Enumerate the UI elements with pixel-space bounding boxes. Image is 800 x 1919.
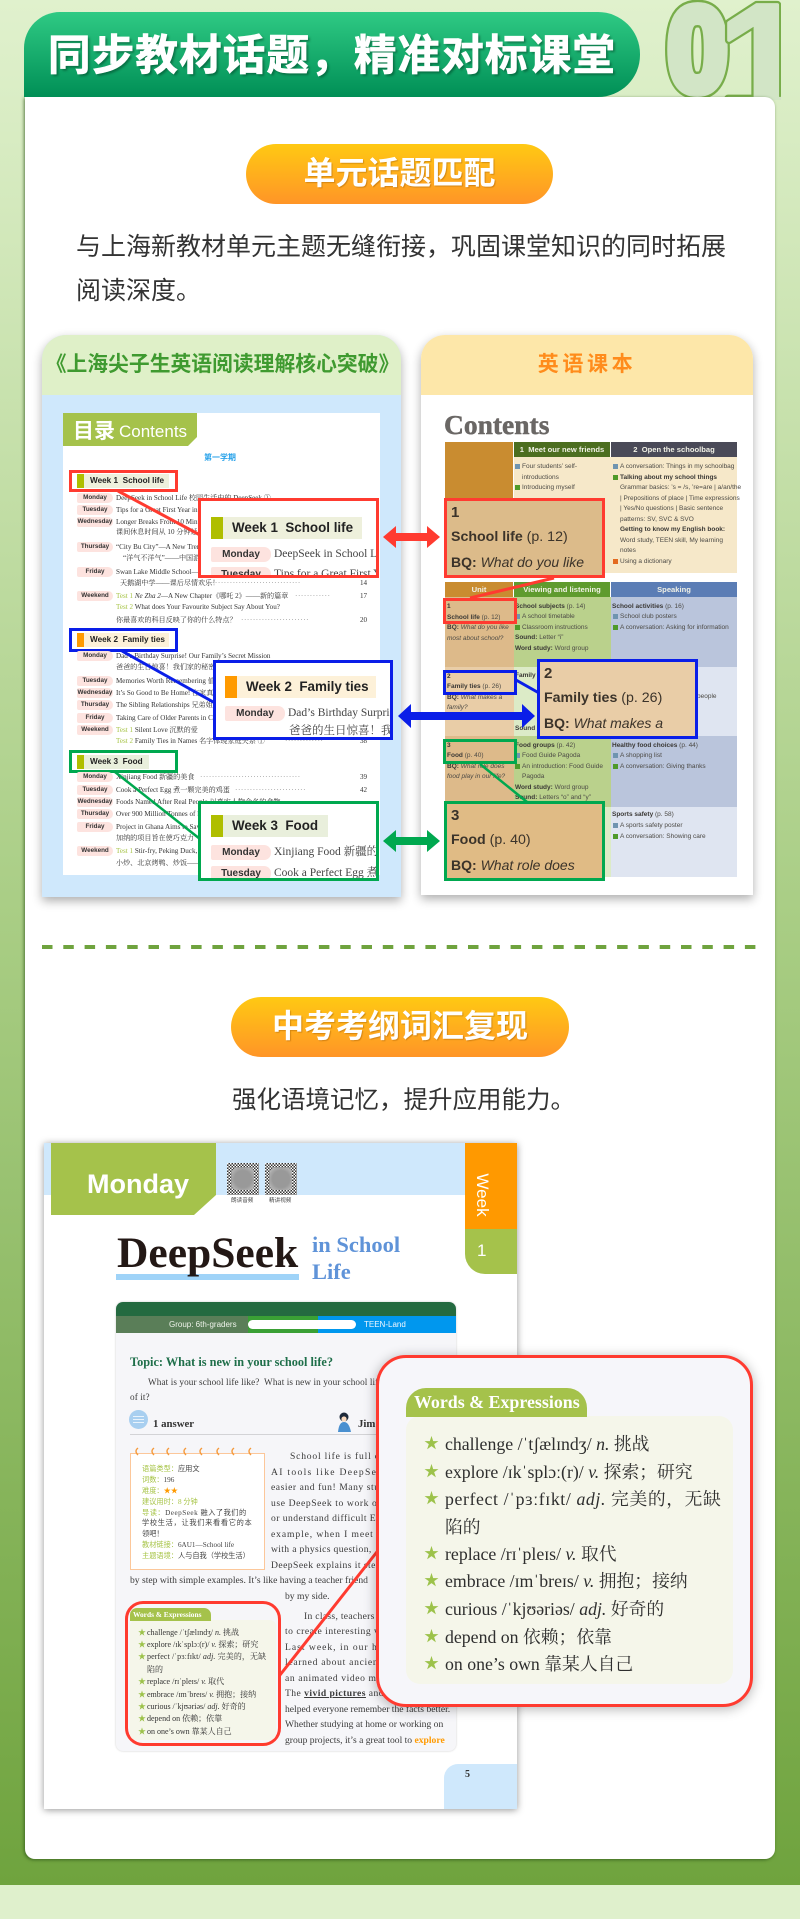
week 3 rows: 小炒、北京烤鸭、炒饭——: [116, 859, 201, 867]
small words and expressions box: ★: [138, 1702, 146, 1711]
small words and expressions box: replace /rɪˈpleɪs/ v. 取代: [147, 1677, 224, 1686]
article body text: or understand difficult En: [271, 1513, 381, 1524]
table bottom block: BQ: What makes a: [447, 694, 502, 701]
table bottom block: food play in our life?: [447, 773, 505, 780]
table bottom block: School activities (p. 16): [612, 603, 684, 610]
table top block: [445, 442, 741, 573]
week 2 rows: Tuesday: [82, 677, 108, 684]
article body text: group projects, it’s a great tool to explore: [285, 1735, 445, 1746]
week 3 rows: Wednesday: [78, 798, 112, 805]
week tab: 1: [477, 1241, 486, 1260]
table bottom block: Food groups (p. 42): [515, 742, 575, 749]
table bottom block: Sound: Letter “i”: [515, 634, 563, 641]
dashed divider: [42, 945, 756, 949]
week 3 rows: Monday: [83, 773, 107, 780]
week 3 rows: Test 1 Stir-fry, Peking Duck, Fried Rice: [116, 847, 229, 855]
week 1 rows: ·······················: [241, 616, 309, 624]
section heading pill: exam vocabulary: [231, 997, 569, 1057]
table bottom block: A sports safety poster: [620, 822, 683, 829]
callout: unit 3 enlarged: Food (p. 40): [451, 832, 531, 848]
table bottom block: A conversation: Showing care: [620, 833, 706, 840]
table top block: | Prepositions of place | Time expressions: [620, 495, 740, 502]
small words and expressions box: ★: [138, 1714, 146, 1723]
QR code: video: [265, 1163, 297, 1204]
vocabulary list: ★: [424, 1656, 439, 1672]
week 1 rows: 天鹅湖中学——课后尽情欢乐！: [120, 579, 219, 587]
small highlight: unit 1: [443, 598, 517, 624]
table top block: Word study, TEEN skill, My learning: [620, 537, 723, 544]
vocabulary list: depend on 依赖；依靠: [445, 1627, 612, 1647]
article body text: example, when I meet: [271, 1529, 374, 1540]
table bottom block: people: [697, 693, 717, 700]
week 2 rows: Weekend: [81, 726, 109, 733]
reading notes box: 词数：196: [142, 1476, 174, 1484]
week 1 heading: Week 1 School life: [90, 476, 164, 485]
section heading pill: unit topic match: [246, 144, 553, 204]
article body text: easier and fun! Many stud: [271, 1482, 385, 1493]
table bottom block: Food Guide Pagoda: [522, 752, 580, 759]
callout: week 1 enlarged: [198, 498, 379, 578]
callout: unit 2 enlarged: Family ties (p. 26): [544, 690, 662, 706]
topic line: Topic: What is new in your school life?: [130, 1355, 333, 1369]
table bottom block: Sports safety (p. 58): [612, 811, 674, 818]
vocabulary list: ★: [424, 1491, 440, 1507]
article body text: [130, 1451, 450, 1746]
forum card: by step with simple examples. It’s like having a teacher friend: [130, 1575, 368, 1586]
small words and expressions box: curious /ˈkjʊəriəs/ adj. 好奇的: [147, 1702, 246, 1711]
week 2 rows: 38: [360, 737, 367, 745]
forum top bar: TEEN-Land: [364, 1320, 406, 1329]
article body text: with a physics question,: [271, 1544, 372, 1555]
table bottom block: Pagoda: [522, 773, 544, 780]
week 1 rows: Weekend: [81, 592, 109, 599]
reading notes box: 语篇类型：应用文: [142, 1465, 200, 1473]
article body text: an animated video ma: [285, 1673, 381, 1684]
section heading pill: exam vocabulary: 中考考纲词汇复现: [272, 1008, 528, 1044]
callout: words and expressions enlarged: [376, 1355, 753, 1707]
callout: week 2 enlarged: Week 2 Family ties: [246, 679, 369, 694]
week 1 rows: [77, 493, 367, 624]
table top block: 2 Open the schoolbag: [633, 445, 715, 454]
callout: unit 2 enlarged: BQ: What makes a: [544, 715, 663, 731]
vocabulary list: ★: [424, 1546, 439, 1562]
panel: English textbook: [421, 335, 753, 895]
week 1 rows: “洋气不洋气”——中国游新风尚: [123, 554, 222, 562]
week 2 rows: It’s So Good to Be Home! 在家真好！: [116, 689, 228, 697]
article body text: School life is full of: [290, 1451, 384, 1462]
forum card: of it?: [130, 1392, 150, 1402]
day tag: [51, 1143, 216, 1215]
table top block: introductions: [522, 474, 559, 481]
table top block: Getting to know my English book:: [620, 526, 725, 533]
title text: 同步教材话题，精准对标课堂: [48, 32, 616, 80]
small box tag: Words & Expressions: [133, 1610, 201, 1619]
article body text: DeepSeek explains it step: [271, 1560, 381, 1571]
week 1 rows: 你最喜欢的科目反映了你的什么特点？: [116, 616, 237, 624]
week 1 rows: Thursday: [81, 543, 109, 550]
vocabulary list: challenge /ˈtʃælɪndʒ/ n. 挑战: [445, 1434, 649, 1454]
table bottom block: School subjects (p. 14): [515, 603, 585, 610]
callout: week 3 enlarged: [198, 801, 379, 881]
connector: blue unit 2: [517, 678, 537, 694]
week 3 rows: Foods Named After Real People 以真实人物命名的食物: [116, 798, 281, 806]
vocabulary list: ★: [424, 1601, 439, 1617]
vocabulary list: explore /ɪkˈsplɔː(r)/ v. 探索；研究: [445, 1462, 693, 1482]
week 1 rows: Swan Lake Middle School—Have Fun After Class: [116, 568, 260, 576]
small words and expressions box: on one’s own 靠某人自己: [147, 1727, 232, 1736]
QR code: audio: 朗读音频: [231, 1198, 253, 1204]
table top block: Four students’ self-: [522, 463, 577, 470]
connector: red week 1: [117, 492, 198, 536]
small words and expressions box: ★: [138, 1677, 146, 1686]
week tab: Week: [473, 1173, 492, 1217]
week 2 rows: Friday: [86, 714, 104, 721]
intro paragraph: 与上海新教材单元主题无缝衔接，巩固课堂知识的同时拓展: [76, 233, 726, 261]
table bottom block: School club posters: [620, 613, 677, 620]
table bottom block: 1: [447, 603, 451, 610]
week 3 rows: Project in Ghana Aims to Save Chocolate: [116, 823, 234, 831]
week 3 rows: 39: [360, 773, 367, 781]
week tab: [465, 1143, 517, 1274]
callout: unit 3 enlarged: 3: [451, 807, 459, 824]
page number tab: [444, 1764, 517, 1809]
small words and expressions box: 陷的: [147, 1665, 163, 1674]
title banner: [24, 12, 640, 97]
table bottom block: A shopping list: [620, 752, 662, 759]
top band: [44, 1143, 465, 1195]
connector: green unit 3: [479, 764, 528, 801]
table bottom block: BQ: What do you like: [447, 624, 509, 631]
week 1 rows: Wednesday: [78, 518, 112, 525]
table top block: | Yes/No questions | Basic sentence: [620, 505, 723, 512]
article body text: Last week, in our h: [285, 1642, 378, 1653]
week 2 rows: Monday: [83, 652, 107, 659]
table bottom block: Unit: [472, 585, 486, 594]
callout: week 1 enlarged: Monday: [222, 549, 260, 560]
small words and expressions box: depend on 依赖；依靠: [147, 1714, 222, 1723]
textbook contents table: [445, 442, 737, 877]
week 3 rows: Cook a Perfect Egg 煮一颗完美的鸡蛋: [116, 786, 230, 794]
forum top bar: Group: 6th-graders: [169, 1320, 237, 1329]
small words and expressions box: [125, 1601, 281, 1746]
table bottom block: Sound: [515, 725, 535, 732]
term label: 第一学期: [204, 453, 236, 462]
decorative number 01: [665, 0, 781, 100]
table bottom block: Food (p. 40): [447, 752, 483, 759]
week 1 rows: Tuesday: [82, 506, 108, 513]
forum top bar: [116, 1302, 456, 1333]
week 2 rows: [77, 651, 367, 745]
week 2 rows: Thursday: [81, 701, 109, 708]
callout: unit 1 enlarged: BQ: What do you like: [451, 554, 584, 570]
small words and expressions box: challenge /ˈtʃælɪndʒ/ n. 挑战: [147, 1628, 239, 1637]
reading notes box: 领吧！: [142, 1530, 164, 1538]
week 2 rows: 爸爸的生日惊喜！我们家的秘密任务: [116, 663, 230, 671]
article body text: to create interesting v: [285, 1626, 379, 1637]
day tag: Monday: [87, 1169, 189, 1199]
panel header: book title: 《上海尖子生英语阅读理解核心突破》: [46, 353, 399, 376]
reading notes box: 教材链接：6AU1—School life: [142, 1541, 234, 1549]
author name: Jim: [358, 1418, 375, 1430]
vocabulary list: 陷的: [445, 1517, 481, 1537]
small highlight: unit 2: [443, 670, 517, 695]
week 2 rows: Wednesday: [78, 689, 112, 696]
panel header: textbook title: 英语课本: [538, 353, 636, 376]
divider: [130, 1434, 442, 1435]
article subtitle: in School: [312, 1232, 400, 1257]
textbook contents heading: Contents: [444, 409, 549, 440]
intro paragraph: 阅读深度。: [76, 277, 201, 305]
callout: week 2 enlarged: Monday: [236, 708, 274, 719]
forum card: [116, 1302, 456, 1751]
small highlight: unit 3: [443, 739, 517, 764]
small words and expressions box: ★: [138, 1727, 146, 1736]
article body text: helped everyone remember the facts better.: [285, 1704, 450, 1715]
small words and expressions box: ★: [138, 1652, 146, 1661]
icon: answer bubble: [129, 1410, 148, 1429]
week 1 rows: ·······························: [209, 579, 301, 587]
callout: unit 1 enlarged: School life (p. 12): [451, 529, 568, 545]
table bottom block: Viewing and listening: [523, 585, 601, 594]
week 2 rows: Test 2 Family Ties in Names 名字体现家庭关系 ①: [116, 737, 265, 745]
article body text: The vivid pictures and: [285, 1688, 384, 1699]
article body text: use DeepSeek to work out: [271, 1498, 386, 1509]
article body text: In class, teachers a: [304, 1611, 382, 1622]
arrow: red double: [383, 526, 440, 548]
table top block: Using a dictionary: [620, 558, 672, 565]
week 1 rows: Monday: [83, 494, 107, 501]
week 2 rows: Taking Care of Older Parents in China: [116, 714, 225, 722]
table bottom block: Word study: Word group: [515, 645, 588, 652]
week 2 rows: Memories Worth Remembering 值得铭记的回忆: [116, 677, 257, 685]
callout: unit 1 enlarged: 1: [451, 504, 459, 521]
callout: week 1 enlarged: Week 1 School life: [232, 520, 353, 535]
week 1 rows: 17: [360, 592, 367, 600]
week 1 rows: DeepSeek in School Life 校园生活中的 DeepSeek ①: [116, 494, 271, 502]
week 3 rows: Tuesday: [82, 786, 108, 793]
week 3 rows: Over 900 Million Tonnes of Food: [116, 810, 212, 818]
week 3 rows: [77, 772, 367, 867]
article body text: AI tools like DeepSeek: [271, 1467, 389, 1478]
week 1 rows: Tips for a Great First Year in Middle School: [116, 506, 241, 514]
week 3 rows: ························: [235, 786, 306, 794]
contents tag: Contents: [119, 422, 187, 441]
callout: week 3 enlarged: Week 3 Food: [232, 818, 318, 833]
week 3 rows: 42: [360, 786, 367, 794]
reading notes box: 导读：DeepSeek 融入了我们的: [142, 1509, 247, 1517]
article body text: by my side.: [285, 1591, 330, 1602]
table bottom block: A conversation: Giving thanks: [620, 763, 706, 770]
QR code: audio: [227, 1163, 259, 1204]
week 1 rows: Test 2 What does Your Favourite Subject Say About You?: [116, 603, 280, 611]
table top block: Talking about my school things: [620, 474, 717, 481]
small words and expressions box: perfect /ˈpɜːfɪkt/ adj. 完美的，无缺: [147, 1652, 266, 1661]
table top block: 1 Meet our new friends: [520, 445, 604, 454]
week 2 rows: Test 1 Silent Love 沉默的爱: [116, 726, 198, 734]
arrow: blue double: [398, 704, 535, 728]
week 2 rows: The Sibling Relationships 兄弟姐妹关系: [116, 701, 234, 709]
callout: week 3 enlarged: Tuesday: [221, 868, 261, 879]
arrow: green double: [383, 830, 440, 852]
week 2 heading: [69, 628, 178, 652]
table bottom block: 3: [447, 742, 451, 749]
section heading pill: unit topic match: 单元话题匹配: [303, 155, 496, 191]
week 1 rows: Longer Breaks From 10 Minutes to 15 Minutes: [116, 518, 250, 526]
week 1 rows: 14: [360, 579, 367, 587]
table bottom block: A school timetable: [522, 613, 575, 620]
callout: unit 3 enlarged: [444, 801, 605, 881]
vocabulary list: ★: [424, 1464, 439, 1480]
article body text: Whether studying at home or working on: [285, 1719, 443, 1730]
week 3 rows: Xinjiang Food 新疆的美食: [116, 773, 194, 781]
table bottom block: Classroom instructions: [522, 624, 588, 631]
week 3 heading: Week 3 Food: [90, 757, 143, 766]
table bottom block: Speaking: [657, 585, 691, 594]
small box background: [130, 1620, 276, 1740]
table bottom block: A conversation: Asking for information: [620, 624, 729, 631]
week 1 rows: ············: [295, 592, 331, 600]
small words and expressions box: embrace /ɪmˈbreɪs/ v. 拥抱；接纳: [147, 1690, 256, 1699]
week 1 rows: 20: [360, 616, 367, 624]
page number: 5: [465, 1769, 470, 1780]
reading notes box: 难度：★★: [142, 1487, 178, 1495]
small box tag: [130, 1608, 211, 1621]
vocabulary list: on one’s own 靠某人自己: [445, 1654, 633, 1674]
week 2 rows: Dad’s Birthday Surprise! Our Family’s Secret Mission: [116, 652, 270, 660]
reading notes box: [130, 1453, 265, 1570]
vocabulary list: ★: [424, 1573, 439, 1589]
article subtitle: Life: [312, 1259, 351, 1284]
callout: unit 2 enlarged: [537, 659, 698, 739]
section intro text: 强化语境记忆，提升应用能力。: [232, 1087, 575, 1114]
vocabulary list: curious /ˈkjʊəriəs/ adj. 好奇的: [445, 1599, 664, 1619]
panel: book page: [44, 1143, 517, 1809]
article title: DeepSeek: [117, 1229, 298, 1277]
contents tag: [63, 413, 197, 446]
table top block: notes: [620, 547, 636, 554]
panel: book contents: [42, 335, 401, 897]
connector: blue week 2: [121, 652, 213, 704]
reading notes box: 学校生活，让我们来看看它的本: [142, 1519, 252, 1527]
table bottom block: Family ties (p. 26): [447, 683, 501, 690]
table bottom block: Healthy food choices (p. 44): [612, 742, 698, 749]
table bottom block: [445, 582, 737, 877]
connector: red unit 1: [470, 578, 554, 598]
table top block: Introducing myself: [522, 484, 575, 491]
panel header: book title: [42, 335, 401, 395]
week 3 rows: Friday: [86, 823, 104, 830]
answer label: 1 answer: [153, 1418, 194, 1430]
table bottom block: Word study: Word group: [515, 784, 588, 791]
vocabulary list: [424, 1434, 721, 1674]
vocabulary list: ★: [424, 1436, 439, 1452]
week 1 rows: 课间休息时间从 10 分钟延长到 15 分钟: [116, 528, 237, 536]
callout: unit 2 enlarged: 2: [544, 665, 552, 682]
vocabulary list: replace /rɪˈpleɪs/ v. 取代: [445, 1544, 617, 1564]
icon: avatar: [338, 1412, 351, 1432]
small words and expressions box: ★: [138, 1628, 146, 1637]
callout: week 2 enlarged: [213, 660, 393, 740]
QR code: video: 精讲视频: [269, 1198, 291, 1204]
table top block: Grammar basics: ’s = /s, ’re=are | a/an/the: [620, 484, 741, 491]
week 3 rows: 加纳的项目旨在使巧克力: [116, 834, 194, 842]
table bottom block: Sound: Letters “o” and “y”: [515, 794, 591, 801]
table top block: A conversation: Things in my schoolbag: [620, 463, 734, 470]
callout: week 3 enlarged: Monday: [222, 847, 260, 858]
week 3 rows: ··································: [200, 773, 301, 781]
small words and expressions box: explore /ɪkˈsplɔː(r)/ v. 探索；研究: [147, 1640, 258, 1649]
question text: What is your school life like? What is new in your school life?: [148, 1377, 387, 1387]
week 1 heading: [69, 470, 178, 492]
week 1 rows: “City Bu City”—A New Trend in Tourism: [116, 543, 236, 551]
contents page: [63, 413, 380, 875]
panel header: textbook title: [421, 335, 753, 395]
connector: words box to enlarged callout: [281, 1550, 376, 1676]
week 3 rows: Thursday: [81, 810, 109, 817]
table bottom block: An introduction: Food Guide: [522, 763, 603, 770]
week 1 rows: Friday: [86, 568, 104, 575]
callout inner background: [406, 1416, 733, 1684]
vocabulary list: embrace /ɪmˈbreɪs/ v. 拥抱；接纳: [445, 1571, 688, 1591]
reading notes box: 主题语境：人与自我（学校生活）: [142, 1552, 250, 1560]
table bottom block: BQ: What role does: [447, 763, 504, 770]
callout: unit 3 enlarged: BQ: What role does: [451, 857, 575, 873]
reading notes box: 建议用时：8 分钟: [142, 1498, 198, 1506]
table top block: patterns: SV, SVC & SVO: [620, 516, 694, 523]
table bottom block: most about school?: [447, 635, 503, 642]
week 2 rows: ·············: [285, 737, 324, 745]
contents tag: 目录: [73, 420, 115, 443]
callout tag: Words & Expressions: [414, 1392, 580, 1412]
intro paragraph: [76, 233, 726, 305]
callout: unit 1 enlarged: [444, 498, 605, 578]
article body text: learned about ancien: [285, 1657, 378, 1668]
week 3 rows: Weekend: [81, 847, 109, 854]
week 3 heading: [69, 750, 178, 773]
small words and expressions box: ★: [138, 1640, 146, 1649]
article subtitle: [312, 1232, 400, 1284]
connector: green week 3: [114, 773, 198, 839]
small words and expressions box: ★: [138, 1690, 146, 1699]
vocabulary list: ★: [424, 1629, 439, 1645]
vocabulary list: perfect /ˈpɜːfɪkt/ adj. 完美的，无缺: [445, 1489, 721, 1509]
table bottom block: family?: [447, 704, 468, 711]
table bottom block: Family: [515, 672, 536, 679]
callout tag: [406, 1388, 587, 1417]
notebook rings: [135, 1448, 252, 1456]
table bottom block: 2: [447, 673, 451, 680]
week 2 heading: Week 2 Family ties: [90, 635, 165, 644]
week 1 rows: Test 1 Ne Zha 2—A New Chapter《哪吒 2》——新的篇章: [116, 592, 288, 600]
table bottom block: School life (p. 12): [447, 614, 500, 621]
